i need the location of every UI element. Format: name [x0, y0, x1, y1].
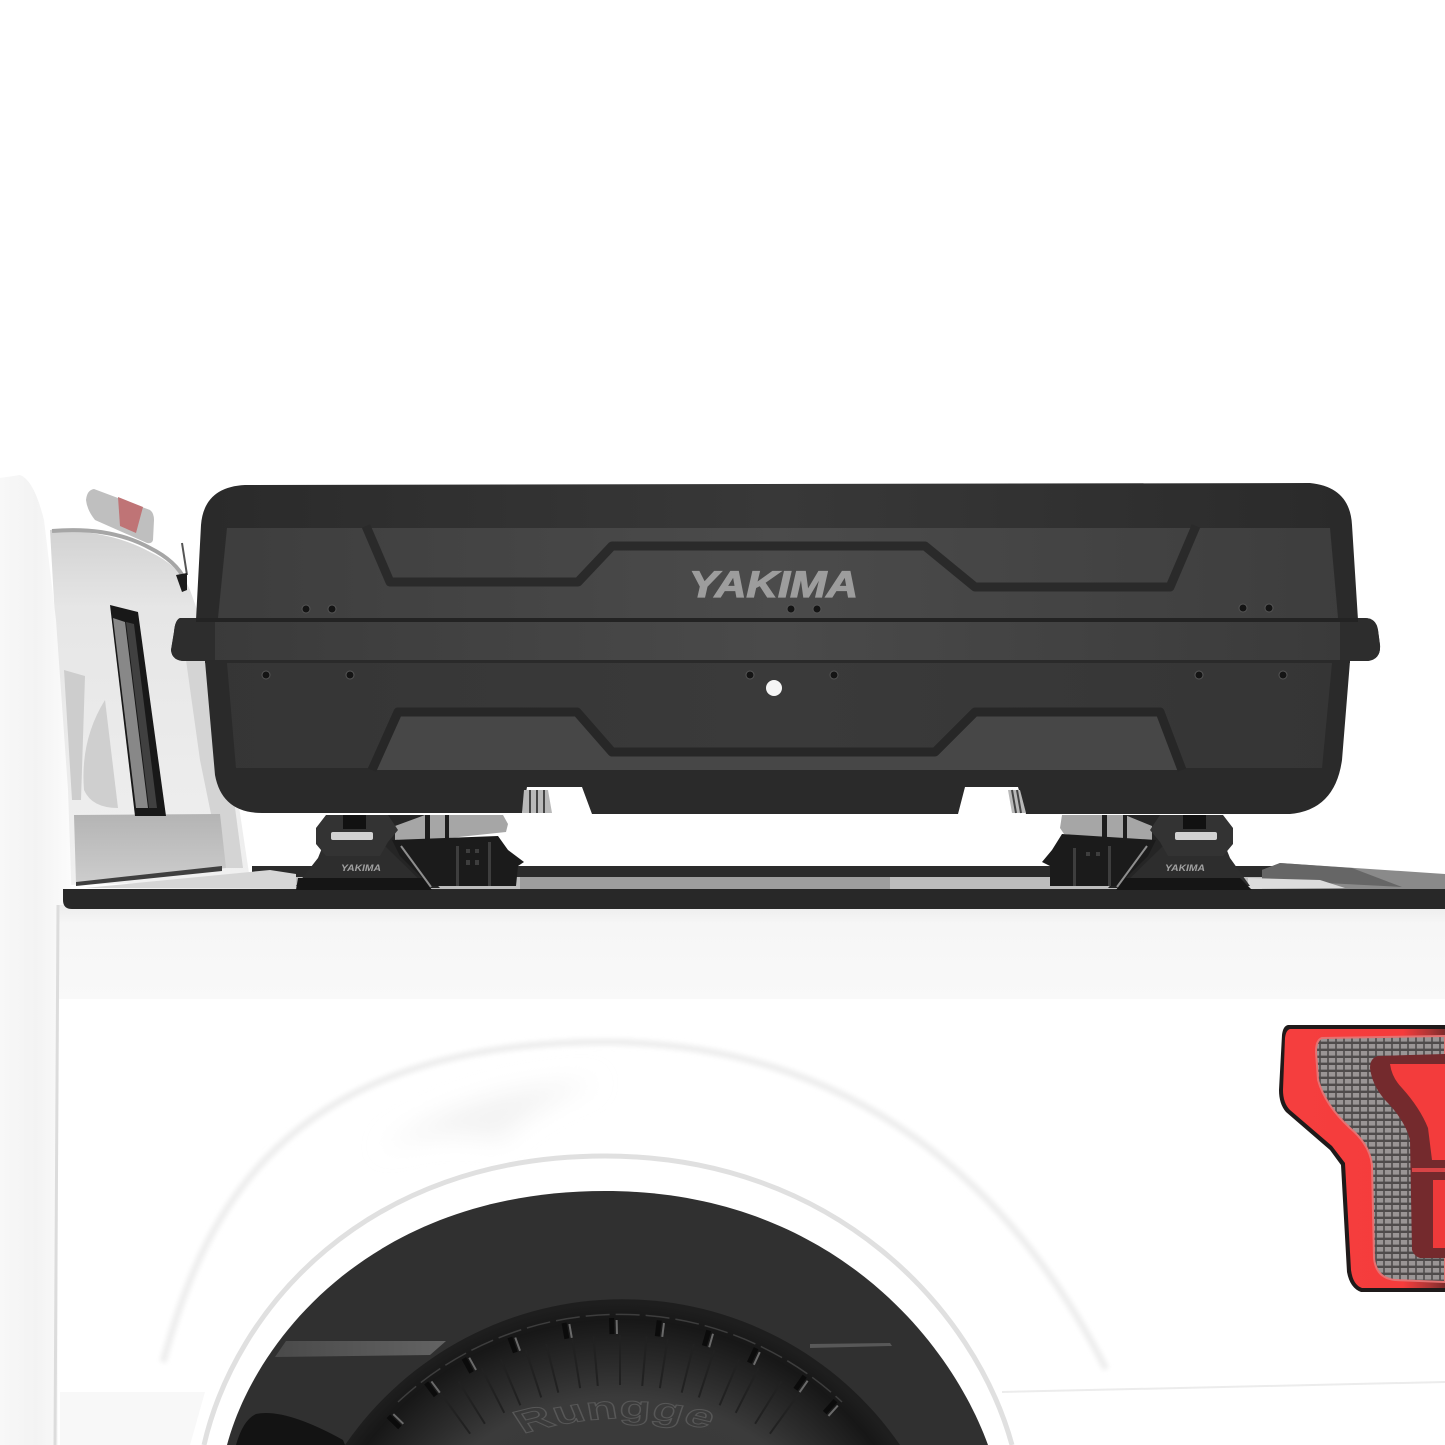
crossbar stripes: [425, 815, 449, 842]
rim left end: [171, 618, 215, 661]
right end plate shadow: [1262, 863, 1402, 887]
lens housing: [1279, 1025, 1445, 1292]
black side rail: [63, 889, 1445, 909]
mount base pad: [1116, 878, 1252, 890]
bed wall dark strip: [76, 866, 222, 886]
deck shadow section: [520, 877, 890, 889]
right notch rib lines: [1012, 790, 1021, 813]
mount label: YAKIMA: [341, 863, 381, 873]
connector behind clamp: [1108, 815, 1168, 888]
crossbar stripes: [1102, 815, 1127, 842]
cab lower shaded wall: [74, 814, 226, 884]
wheel arch: [227, 1191, 988, 1445]
mount lever: [1175, 832, 1217, 840]
tonneau strip: [252, 866, 1272, 878]
cab roof trim: [52, 530, 185, 580]
cargo box: [171, 483, 1380, 814]
roof marker red lens: [118, 497, 143, 533]
truck bed upper band: [58, 905, 1445, 999]
mount label: YAKIMA: [1165, 863, 1205, 873]
lid groove: [366, 526, 1196, 587]
lid screws: [302, 604, 1273, 613]
red lens: [1283, 1029, 1445, 1288]
clamp details: [1073, 846, 1111, 886]
clamp block: [1042, 834, 1156, 886]
silver diagonal: [401, 846, 431, 887]
lock: [766, 680, 782, 696]
left rack mount: [296, 815, 524, 890]
lower right crease: [1002, 1382, 1445, 1392]
deck surface: [296, 877, 1356, 889]
mount base: [296, 846, 428, 888]
lid rim: [171, 618, 1380, 661]
inner dark housing: [1370, 1054, 1445, 1258]
rear window slit: [110, 605, 166, 816]
tread ticks: [388, 1318, 835, 1427]
lower shell: [205, 661, 1350, 814]
rim bottom line: [205, 660, 1350, 663]
chassis bar left: [275, 1341, 446, 1357]
right end plate: [1262, 863, 1445, 889]
rim top line: [196, 618, 1358, 622]
rear window glass: [113, 618, 148, 808]
pillar seam: [55, 905, 58, 1445]
cab interior curve: [83, 700, 118, 808]
mount head: [1150, 815, 1233, 856]
inner red crossbar: [1412, 1168, 1445, 1172]
mount head: [316, 815, 398, 856]
mount latch block: [1183, 815, 1206, 829]
inner red cap: [1390, 1064, 1445, 1160]
right rack mount: [1042, 815, 1252, 890]
antenna clip: [176, 573, 187, 592]
rim right end: [1340, 618, 1380, 661]
mount base: [1120, 846, 1250, 888]
lower inner panel: [227, 663, 1332, 768]
fender inner rim: [204, 1156, 1012, 1445]
connector behind clamp: [380, 815, 440, 888]
right pale section: [1248, 878, 1345, 889]
silver crossbar: [395, 815, 508, 840]
left notch rib lines: [530, 790, 544, 813]
lid lighter panel: [218, 528, 1338, 618]
cab back wall: [50, 530, 250, 885]
tire sidewall text: Rungge: [512, 1400, 713, 1434]
pale deck wedge: [85, 870, 296, 889]
fender soft shading: [380, 1082, 600, 1150]
lower body crease: [60, 1392, 205, 1445]
window inner bar: [126, 622, 157, 808]
lower groove: [372, 712, 1182, 770]
arch interior: [227, 1191, 988, 1445]
lower raised panel: [372, 712, 1182, 770]
dark corner: [236, 1413, 345, 1445]
cab pale column: [186, 660, 243, 868]
roof marker light: [86, 489, 154, 543]
tread outer stitching: [398, 1314, 842, 1402]
tire: [345, 1299, 900, 1445]
right notch ribs: [1008, 790, 1026, 813]
mesh panel: [1316, 1036, 1445, 1282]
clamp details: [456, 842, 491, 886]
mount lever: [331, 832, 373, 840]
truck cab rear: [50, 489, 250, 886]
antenna: [182, 543, 187, 575]
mount base pad: [296, 878, 432, 890]
clamp block: [392, 836, 524, 886]
logo: YAKIMA: [689, 564, 858, 605]
left notch ribs: [522, 790, 552, 813]
deck rail: [63, 863, 1445, 909]
silver crossbar: [1060, 815, 1152, 842]
tread grooves: [441, 1335, 799, 1434]
cab pillar: [0, 475, 72, 1445]
lid shell: [196, 483, 1358, 620]
tread highlights: [393, 1320, 838, 1424]
silver diagonal: [1117, 846, 1147, 887]
lower screws: [262, 671, 1287, 679]
cab interior reflections: [64, 670, 85, 800]
mount latch block: [343, 815, 366, 829]
chassis bar right: [810, 1343, 892, 1348]
fender outer contour: [163, 1042, 1106, 1369]
inner red stem: [1433, 1180, 1445, 1248]
tail light: [1279, 1025, 1445, 1292]
